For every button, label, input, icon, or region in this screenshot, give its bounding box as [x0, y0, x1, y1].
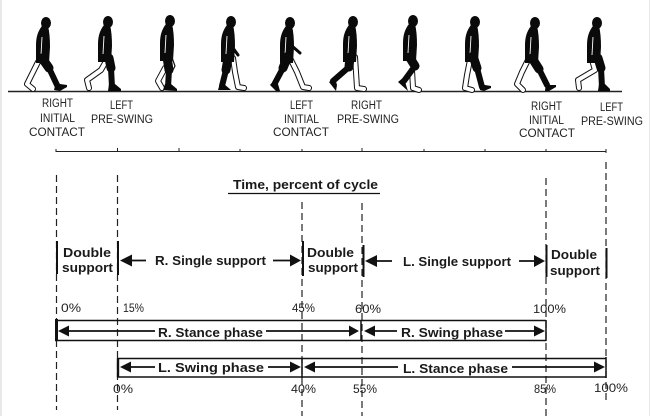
left swing phase: L. Swing phase — [158, 360, 264, 375]
upper percent labels: 60% — [355, 304, 381, 316]
upper percent labels: 0% — [61, 303, 81, 315]
figure 3: mid swing — [158, 15, 177, 91]
figure 5: left initial contact — [270, 17, 309, 91]
double support 2: support — [308, 260, 359, 275]
label: left pre-swing 2: PRE-SWING — [581, 116, 643, 128]
title: time percent of cycle: Time, percent of cycle — [233, 177, 378, 192]
gait figures row — [27, 15, 610, 91]
left stance phase — [304, 361, 605, 376]
lower percent labels — [113, 383, 628, 396]
lower percent labels: 55% — [353, 384, 377, 396]
double support 1 — [57, 241, 118, 275]
left leg phase bar — [117, 357, 606, 378]
double support 3 — [546, 245, 606, 278]
ground line — [8, 90, 622, 92]
right stance phase: R. Stance phase — [158, 325, 263, 340]
label: left initial contact: CONTACT — [273, 127, 329, 139]
double support 2 — [303, 241, 364, 277]
label: left pre-swing: PRE-SWING — [91, 114, 153, 126]
label: right initial contact 2: RIGHT — [531, 101, 562, 113]
upper percent labels: 15% — [123, 303, 144, 315]
right stance phase — [58, 325, 359, 340]
double support 3: Double — [551, 247, 597, 262]
figure 9: right initial contact — [517, 17, 556, 91]
double support 3: support — [550, 263, 601, 278]
label: right initial contact: RIGHT — [42, 98, 73, 110]
label: left initial contact: INITIAL — [284, 114, 320, 126]
label: left pre-swing: LEFT — [110, 100, 133, 112]
figure 4: terminal swing — [218, 16, 244, 90]
lower percent labels: 100% — [594, 383, 628, 395]
figure 6: right pre-swing — [329, 16, 364, 91]
double support 1: Double — [63, 245, 111, 260]
left swing phase — [120, 360, 301, 375]
dashed event guides — [56, 162, 606, 416]
right leg phase bar — [55, 319, 546, 341]
left single support: L. Single support — [403, 254, 512, 269]
right swing phase: R. Swing phase — [401, 325, 503, 340]
double support 2: Double — [307, 245, 354, 260]
lower percent labels: 0% — [113, 384, 133, 396]
figure 1: right initial contact — [27, 17, 67, 91]
right swing phase — [364, 325, 545, 340]
label: left initial contact: LEFT — [290, 100, 313, 112]
figure 8: terminal stance — [465, 16, 491, 91]
figure 7: mid stance — [398, 15, 419, 91]
label: right pre-swing: RIGHT — [351, 100, 382, 112]
label: right pre-swing: PRE-SWING — [337, 114, 399, 126]
upper percent labels: 45% — [292, 303, 315, 315]
upper percent labels — [61, 303, 566, 316]
left stance phase: L. Stance phase — [403, 361, 508, 376]
figure 2: left pre-swing — [87, 16, 121, 91]
left single support — [365, 254, 545, 269]
label: right initial contact 2: CONTACT — [519, 128, 575, 140]
lower percent labels: 85% — [534, 384, 556, 396]
event labels — [29, 98, 643, 140]
double support 1: support — [62, 260, 114, 275]
upper percent labels: 100% — [533, 304, 566, 316]
label: right initial contact 2: INITIAL — [529, 115, 565, 127]
label: right initial contact: INITIAL — [40, 113, 76, 125]
right single support: R. Single support — [155, 253, 267, 268]
time scale with ticks — [56, 148, 606, 153]
label: right initial contact: CONTACT — [29, 127, 85, 139]
right single support — [120, 253, 301, 268]
figure 10: left pre-swing — [578, 17, 610, 91]
support row — [57, 241, 606, 278]
lower percent labels: 40% — [291, 384, 316, 396]
label: left pre-swing 2: LEFT — [600, 102, 623, 114]
